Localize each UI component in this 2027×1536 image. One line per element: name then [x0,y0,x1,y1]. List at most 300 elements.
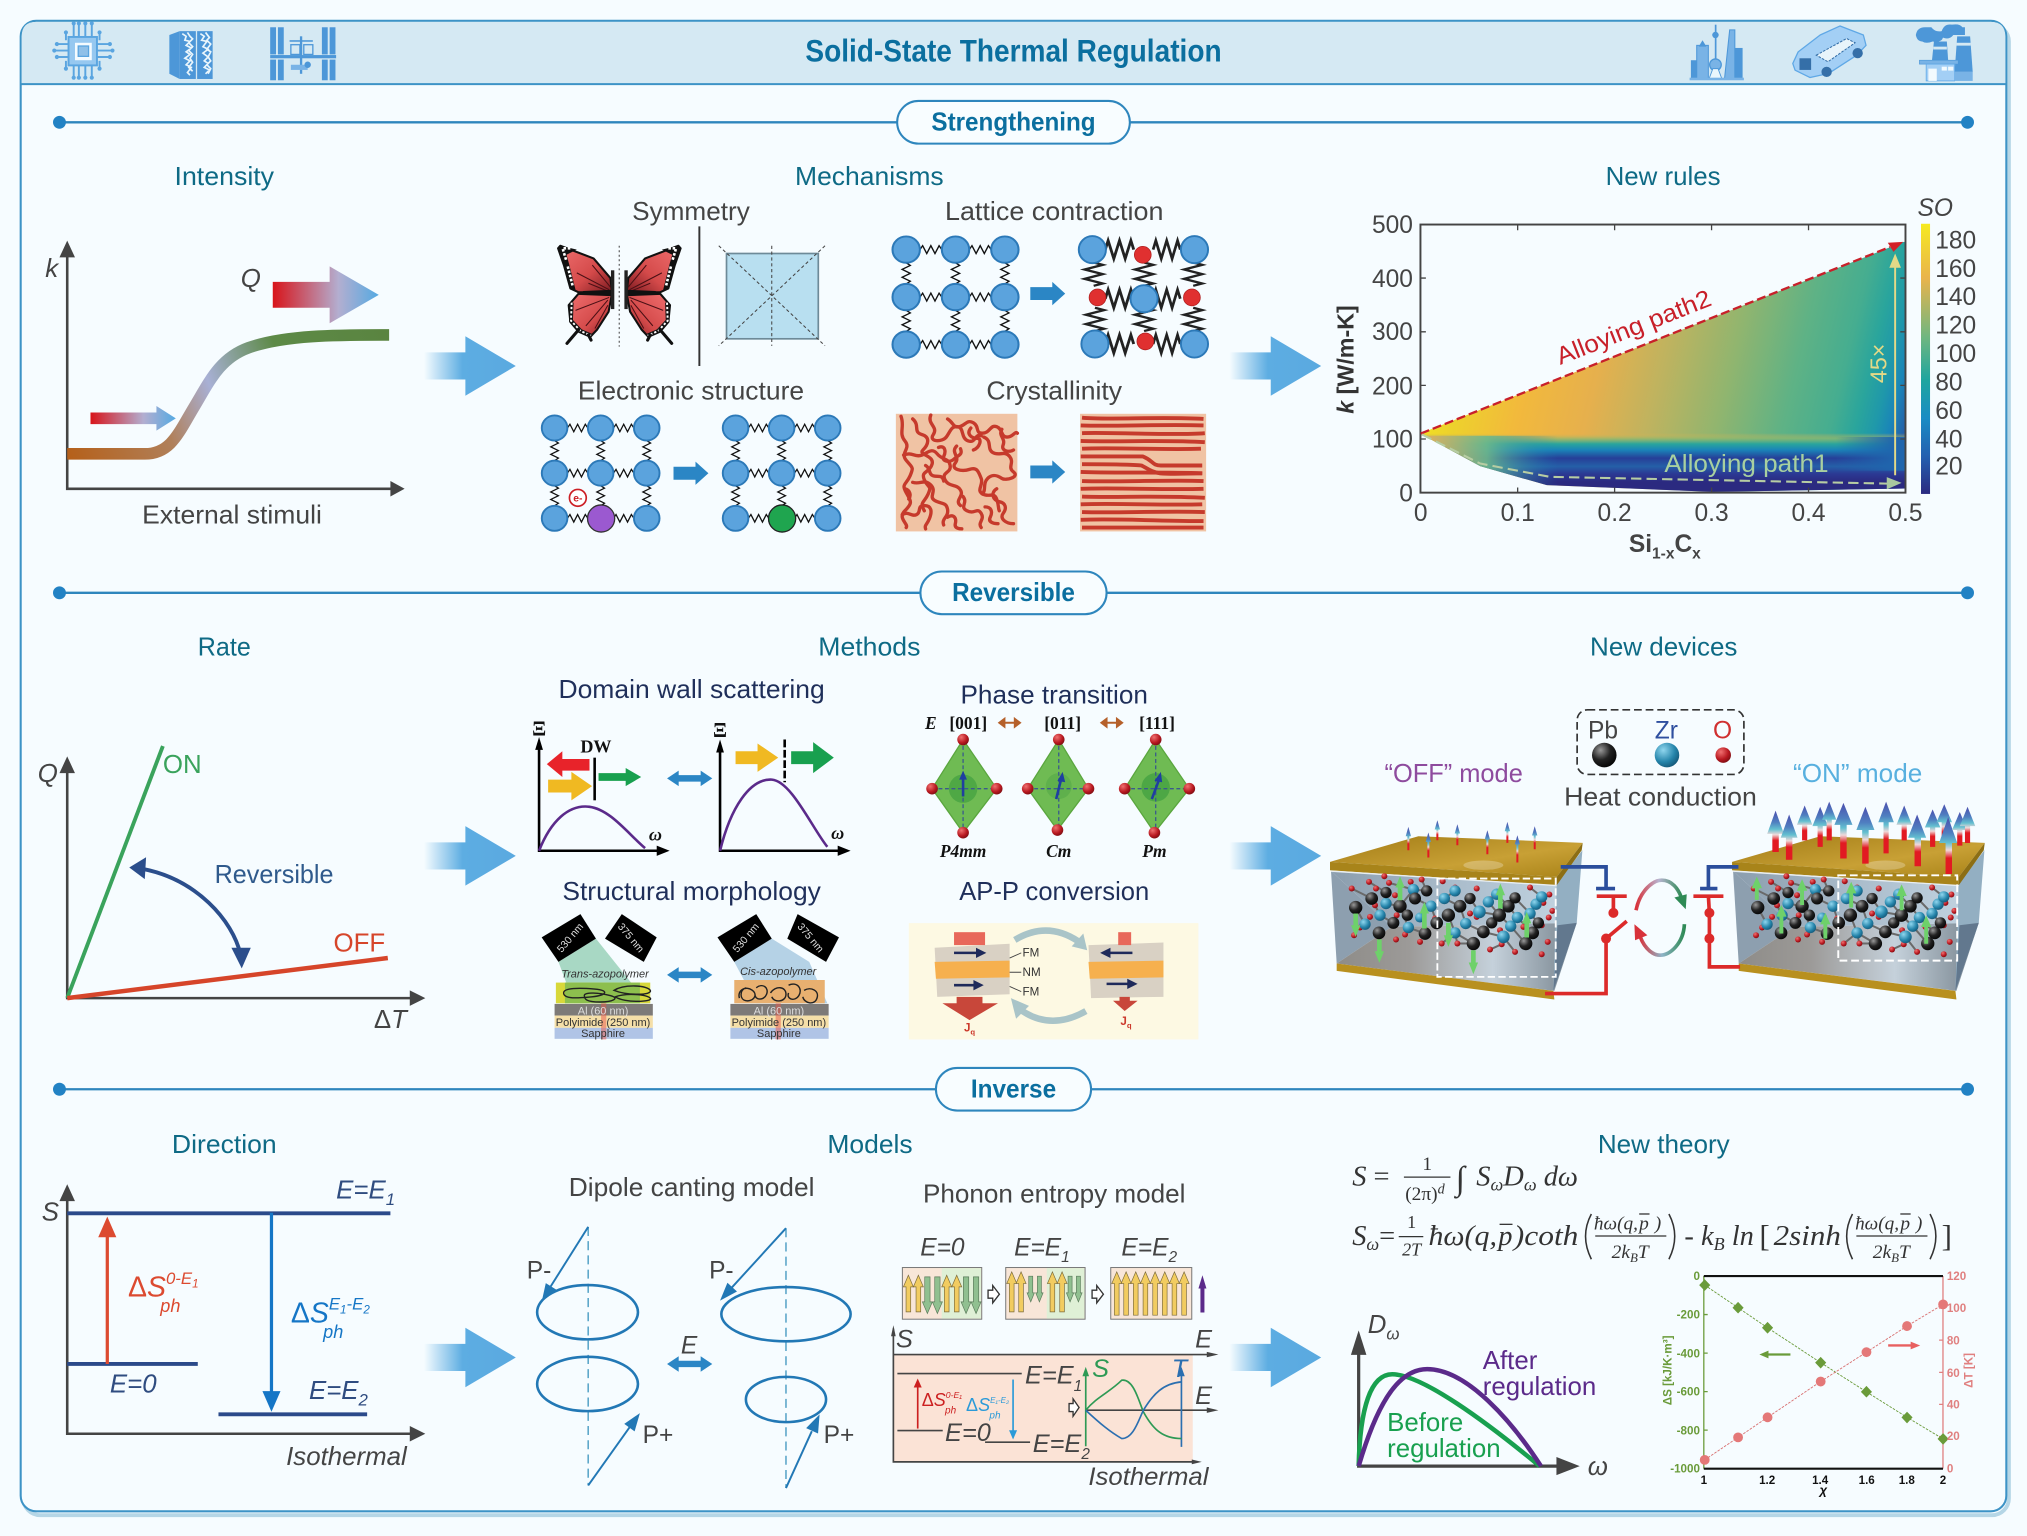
chart: entropy levels: E=0 [110,1370,157,1398]
equation: spectral entropy: 1 [1407,1212,1416,1232]
diagram: entropy levels: S [896,1326,913,1354]
axis labels: -600 [1677,1386,1700,1399]
equation: total entropy: ω [1524,1175,1537,1195]
diagram: entropy levels: ph [944,1406,957,1417]
title: Solid-State Thermal Regulation [805,34,1222,69]
chart: entropy and temperature versus chi [1661,1270,1976,1498]
dipole: left: P+ [643,1422,673,1449]
equation: spectral entropy: ln [1725,1221,1754,1252]
chart: DW left [532,719,670,856]
diagram: entropy levels: ΔS [966,1395,990,1415]
chart: entropy levels: ph [322,1322,343,1342]
heading: Intensity: Intensity [175,163,274,191]
layer labels: NM [1023,966,1041,979]
panel: crystallinity [896,378,1206,531]
dipole: right [709,1228,854,1488]
label: red entropy change: 1 [192,1278,199,1291]
field label and arrow: E [681,1333,698,1360]
octahedron: P4mm: P4mm [939,841,986,861]
panel: phonon entropy model: Phonon entropy model [923,1180,1185,1208]
chart: entropy levels: 2 [358,1390,369,1409]
panel: lattice contraction: Lattice contraction [945,198,1163,226]
equation: spectral entropy: = [1379,1221,1395,1252]
arrow: red [914,1379,922,1429]
diagram: entropy levels: T [1172,1355,1189,1383]
device: OFF mode [1330,820,1583,1000]
y tick labels: 200 [1372,373,1413,400]
divider: Inverse [53,1068,1974,1111]
axis labels: -400 [1677,1347,1700,1360]
device: cis-azopolymer: Cis-azopolymer [740,966,818,978]
colour bar: 40 [1935,426,1963,453]
label: blue entropy change: 1 [340,1304,347,1317]
equation: spectral entropy: ħω(q, [1594,1214,1638,1235]
icon: electric car [1793,26,1866,78]
colour bar: 140 [1935,284,1976,311]
label: red entropy change: ΔS [128,1272,166,1304]
heat flux arrows large [1767,802,1975,874]
equation: total entropy: ∫ [1454,1160,1468,1198]
x tick labels: 0.5 [1888,500,1923,527]
y axis title: k [W/m-K] [1332,305,1358,414]
equation: total entropy: d [1438,1181,1446,1197]
axis labels: χ [1818,1483,1828,1498]
dipole: left: P- [527,1258,551,1285]
layer labels: FM [1023,947,1039,960]
x axis title: C [1674,531,1692,558]
chart: DW left: Ξ [532,719,546,741]
x tick labels: 0.1 [1501,500,1535,527]
diagram: entropy levels: 2 [1080,1446,1090,1463]
diagram: entropy levels: Isothermal [1088,1463,1210,1491]
equation: spectral entropy: S [1352,1221,1366,1252]
chart: entropy levels: Isothermal [286,1443,408,1471]
colour bar: 60 [1935,398,1963,425]
path 2: Alloying path2 [1553,285,1715,371]
heat map [1419,224,1905,493]
axis labels: ΔT [K] [1963,1353,1976,1388]
x tick labels [1414,500,1923,527]
x axis title: Si [1629,531,1652,558]
dipole: left [527,1227,673,1485]
legend: atoms: O [1713,717,1732,744]
diagram: entropy levels [891,1325,1218,1491]
chart: DW right: Ξ [713,720,727,742]
equation: total entropy: D [1502,1162,1524,1193]
chart: thermal conductivity map [1332,195,1976,563]
arrow: purple [1198,1275,1206,1313]
series: entropy [1699,1279,1949,1445]
axis labels: 1.4 [1812,1474,1829,1487]
panel: domain wall scattering [532,676,851,856]
heat flux arrows small [1406,820,1537,863]
arrow: reversible [129,857,251,968]
heading: Rate: Rate [198,634,251,662]
diagram: entropy levels: ph [988,1411,1001,1422]
equation: spectral entropy: p [1898,1214,1910,1235]
octahedron: Pm: Pm [1141,841,1167,861]
y tick labels: 100 [1372,426,1413,453]
diagram: entropy levels: E [1195,1382,1213,1410]
field labels [920,1234,1177,1266]
chart: phonon density before and after: regulation [1483,1373,1596,1401]
icon: symmetric square [719,246,825,346]
x tick labels: 0.2 [1598,500,1632,527]
diagram: entropy levels: E=E [1033,1430,1081,1458]
arrow: row 1 right [1229,336,1321,396]
colour bar: SO [1917,195,1953,222]
stack right [1088,932,1163,1030]
field labels: 2 [1167,1249,1177,1266]
lattice: before [893,236,1019,358]
chart: entropy levels: E=E [336,1176,386,1204]
cycle arrows [1634,880,1687,955]
series: temperature [1700,1299,1948,1465]
equation: spectral entropy: p [1496,1221,1512,1252]
divider: Strengthening: Strengthening [931,109,1096,137]
curve [67,335,389,454]
chart: intensity versus external stimuli [45,241,405,530]
octahedron: Cm [1022,734,1094,861]
colour bar: 160 [1935,256,1976,283]
curve: before [1359,1374,1540,1466]
chart: entropy levels: 1 [386,1190,395,1209]
panel: electronic structure: Electronic structure [578,378,804,406]
axis labels: 60 [1947,1367,1960,1380]
icon: microchip [52,21,115,80]
path 1: Alloying path1 [1664,451,1829,478]
octahedron: P4mm [926,734,1003,861]
axis labels: -1000 [1670,1463,1700,1476]
circuit switch [1545,867,1740,994]
arrow [674,462,708,485]
device: trans-azopolymer: Al (60 nm) [578,1005,628,1017]
axis labels: 40 [1947,1399,1960,1412]
equation: spectral entropy [1352,1212,1952,1265]
axis labels: 1.2 [1759,1474,1775,1487]
diagram: entropy levels: E [1195,1326,1213,1354]
arrow: row 1 left [424,336,516,396]
crystal direction labels: E [924,713,937,733]
diagram: entropy levels: E=0 [945,1419,991,1447]
device: trans-azopolymer [542,914,657,1040]
45x arrow: 45× [1866,344,1892,383]
divider: Reversible: Reversible [952,579,1075,607]
axis labels: 100 [1947,1302,1966,1315]
colour bar: 120 [1935,313,1976,340]
device: trans-azopolymer: Polyimide (250 nm) [556,1017,650,1029]
label: heat conduction: Heat conduction [1564,783,1757,811]
curve: after [1359,1369,1541,1466]
stack left [935,932,1010,1036]
octahedron: Cm: Cm [1046,841,1071,861]
equation: spectral entropy: T [1638,1242,1650,1263]
selection box [1838,875,1957,961]
dipole: right: P- [709,1258,734,1285]
y tick labels [1372,212,1413,508]
chart: phonon density before and after: regulation [1387,1435,1501,1463]
path 2 [1421,242,1903,434]
label: red entropy change: 0-E [166,1269,193,1288]
panel: AP-P conversion: AP-P conversion [959,878,1149,906]
device: trans-azopolymer: 375 nm [615,922,645,955]
stack right: q [1127,1021,1132,1030]
axis labels: 120 [1947,1270,1966,1283]
field labels: E=E [1014,1234,1061,1261]
lattice: after [723,415,841,532]
equation: total entropy: dω [1537,1162,1578,1193]
header band [21,21,2006,84]
chart: rate on off: Reversible [215,861,334,889]
arrow [988,1286,999,1303]
device: trans-azopolymer: Trans-azopolymer [561,968,650,980]
arrow: blue [1009,1380,1017,1440]
device: cis-azopolymer: 530 nm [731,922,762,955]
panel: symmetry [558,198,825,366]
chart: rate on off: ΔT [374,1006,409,1034]
divider: Strengthening [53,101,1974,144]
icon: butterfly [558,246,681,347]
device: cis-azopolymer: Sapphire [757,1028,801,1040]
chart: phonon density before and after: D [1368,1311,1386,1339]
label: ON mode: “ON” mode [1793,760,1922,788]
layer labels: FM [1023,986,1039,999]
green spin arrows [1752,877,1931,944]
equation: spectral entropy: 2sinh [1774,1221,1841,1252]
colour bar [1917,195,1976,494]
cycle arrows [1015,931,1086,1021]
chart: phonon density before and after: ω [1588,1453,1608,1481]
chart: entropy levels: S [42,1198,59,1226]
axis labels: 2 [1940,1474,1946,1487]
divider: Inverse: Inverse [971,1076,1056,1104]
chart: phonon density before and after: After [1483,1347,1538,1375]
arrow: stimulus [90,406,176,431]
heading: New devices: New devices [1590,634,1737,662]
equation: total entropy: (2π) [1405,1184,1438,1205]
heading: New rules: New rules [1606,163,1721,191]
chart: phonon density before and after: ω [1386,1324,1399,1343]
equation: spectral entropy: 2k [1873,1242,1891,1263]
axis labels: 0 [1693,1270,1700,1283]
panel: crystallinity: Crystallinity [986,378,1122,406]
lattice: after [1079,236,1208,358]
y tick labels: 500 [1372,212,1413,239]
equation: spectral entropy: - k [1684,1221,1714,1252]
arrow: red [98,1217,116,1364]
legend: atoms [1577,710,1744,774]
equation: spectral entropy: ħω(q, [1428,1221,1497,1252]
device: cis-azopolymer: Al (60 nm) [754,1005,804,1017]
levels [67,1213,390,1414]
equation: spectral entropy: p [1637,1214,1649,1235]
stack left: q [970,1027,975,1036]
equation: spectral entropy: ħω(q, [1855,1214,1899,1235]
arrow: row 2 left [424,826,516,886]
label: OFF mode: “OFF” mode [1385,760,1523,788]
dipole: right: P+ [824,1422,854,1449]
axis labels: -200 [1677,1309,1700,1322]
field label and arrow [667,1333,712,1372]
arrow: row 2 right [1229,826,1321,886]
box: E=E2 [1111,1268,1192,1319]
axis labels: 1.8 [1899,1474,1915,1487]
icon: city skyline [1690,25,1744,80]
device: trans-azopolymer: Sapphire [581,1028,625,1040]
arrow: blue [262,1213,281,1412]
chart: intensity versus external stimuli: External stimuli [142,502,322,530]
heading: Direction: Direction [172,1131,277,1159]
arrow [667,771,712,786]
x axis title: x [1692,546,1701,563]
icon: porous block [169,31,213,79]
diagram: entropy levels: S [1092,1355,1109,1383]
chart: intensity versus external stimuli: k [45,255,59,283]
arrow: Q [273,266,379,323]
axis labels: ΔS [kJ/K·m³] [1661,1335,1674,1405]
heading: Models: Models [827,1131,913,1159]
icon: space station [270,27,336,80]
crystal direction labels: [011] [1044,713,1081,733]
axis labels [1661,1270,1976,1498]
label: blue entropy change: -E [347,1295,364,1314]
arrow: hollow [1069,1399,1079,1416]
equation: spectral entropy: B [1714,1234,1725,1254]
panel: lattice contraction [893,198,1208,358]
panel: dipole canting model [527,1174,854,1488]
panel: domain wall scattering: Domain wall scattering [558,676,825,704]
box: E=0 [902,1268,982,1319]
axis labels: 20 [1947,1430,1960,1443]
field labels: 1 [1061,1249,1070,1266]
lattice: before [542,415,660,532]
equation: spectral entropy: B [1630,1250,1638,1265]
equation: spectral entropy: 2k [1612,1242,1630,1263]
chart: phonon density before and after: Before [1387,1409,1463,1437]
field labels: E=0 [920,1234,965,1261]
heading: Methods: Methods [818,634,920,662]
legend: atoms: Zr [1655,717,1678,744]
chart: entropy levels [42,1176,425,1471]
device: ON mode [1732,802,1985,1000]
divider: Reversible [53,572,1974,614]
chart: entropy levels: ph [159,1296,180,1316]
path 1 [1422,434,1902,489]
equation: total entropy [1352,1154,1578,1205]
stack left: J [964,1022,970,1035]
panel: dipole canting model: Dipole canting model [569,1174,814,1202]
arrow [1030,282,1065,305]
stack right: J [1120,1015,1127,1028]
device: cis-azopolymer: 375 nm [795,922,825,955]
panel: symmetry: Symmetry [632,198,750,226]
crystal direction labels: [111] [1139,713,1175,733]
equation: spectral entropy: [ [1759,1218,1770,1253]
diagram: entropy levels: 0-E₁ [946,1390,962,1400]
colour bar: 100 [1935,341,1976,368]
equation: spectral entropy: ] [1942,1218,1952,1253]
inset S and T curves [1082,1367,1218,1447]
equation: spectral entropy: T [1899,1242,1911,1263]
chart: entropy levels: E=E [309,1377,359,1405]
lattice: before: e- [573,494,583,505]
selection box [1437,879,1556,977]
equation: spectral entropy: ) [1654,1214,1661,1235]
chart: intensity versus external stimuli: Q [241,265,261,293]
chart: rate on off [38,746,425,1034]
texture: disordered [896,414,1017,531]
equation: spectral entropy: )coth [1512,1221,1578,1252]
axis labels: 1.6 [1859,1474,1875,1487]
x tick labels: 0 [1414,500,1428,527]
chart: rate on off: OFF [334,930,385,958]
label: blue entropy change: ΔS [291,1298,329,1330]
equation: total entropy: 1 [1422,1154,1432,1175]
equation: total entropy: S [1476,1162,1491,1193]
octahedron: Pm [1119,734,1195,861]
diagram: entropy levels: ΔS [922,1390,946,1410]
diagram: entropy levels: 1 [1074,1378,1082,1395]
arrow [667,967,712,983]
icon: factory [1916,24,1973,81]
x tick labels: 0.4 [1791,500,1826,527]
panel: phonon entropy model [891,1180,1218,1491]
series arrows [1765,1354,1790,1356]
legend: atoms: Pb [1588,717,1618,744]
green spin arrows [1351,876,1531,974]
y tick labels: 300 [1372,319,1413,346]
panel: structural morphology: Structural morphology [562,878,821,906]
x axis title: 1-x [1652,546,1675,563]
device: cis-azopolymer [717,914,839,1040]
x tick labels: 0.3 [1695,500,1729,527]
diagram: entropy levels: E₁-E₂ [990,1396,1009,1405]
panel: structural morphology [542,878,839,1040]
panel: phase transition: Phase transition [960,681,1148,709]
y tick labels: 400 [1372,266,1413,293]
arrow: row 3 left [424,1328,516,1387]
chart: DW left: ω [649,824,662,844]
chart: DW right: ω [831,823,844,843]
line ON [67,746,163,998]
colour bar: 80 [1935,370,1963,397]
y tick labels: 0 [1399,481,1413,508]
equation: spectral entropy: ω [1366,1234,1379,1254]
axis labels: 0 [1947,1463,1953,1476]
axis labels: -800 [1677,1424,1700,1437]
chart: DW right [713,720,851,856]
axis labels: 1 [1701,1474,1708,1487]
chart: DW left: DW [580,736,612,756]
crystal direction labels: [001] [949,713,987,733]
box: E=E1 [1006,1268,1085,1319]
label: blue entropy change: 2 [362,1304,370,1317]
chart: phonon density before and after [1351,1311,1608,1481]
texture: aligned [1080,414,1206,531]
line OFF [67,958,388,998]
field labels: E=E [1121,1234,1168,1261]
chart: rate on off: ON [163,751,202,779]
axis labels: 80 [1947,1335,1960,1348]
equation: total entropy: S = [1352,1162,1390,1193]
equation: total entropy: ω [1491,1175,1503,1195]
arrow [1030,460,1065,484]
crystal direction labels [924,713,1175,733]
panel: AP-P conversion [909,878,1198,1039]
device: trans-azopolymer: 530 nm [555,922,586,955]
chart: rate on off: Q [38,760,58,788]
heading: Mechanisms: Mechanisms [795,163,944,191]
